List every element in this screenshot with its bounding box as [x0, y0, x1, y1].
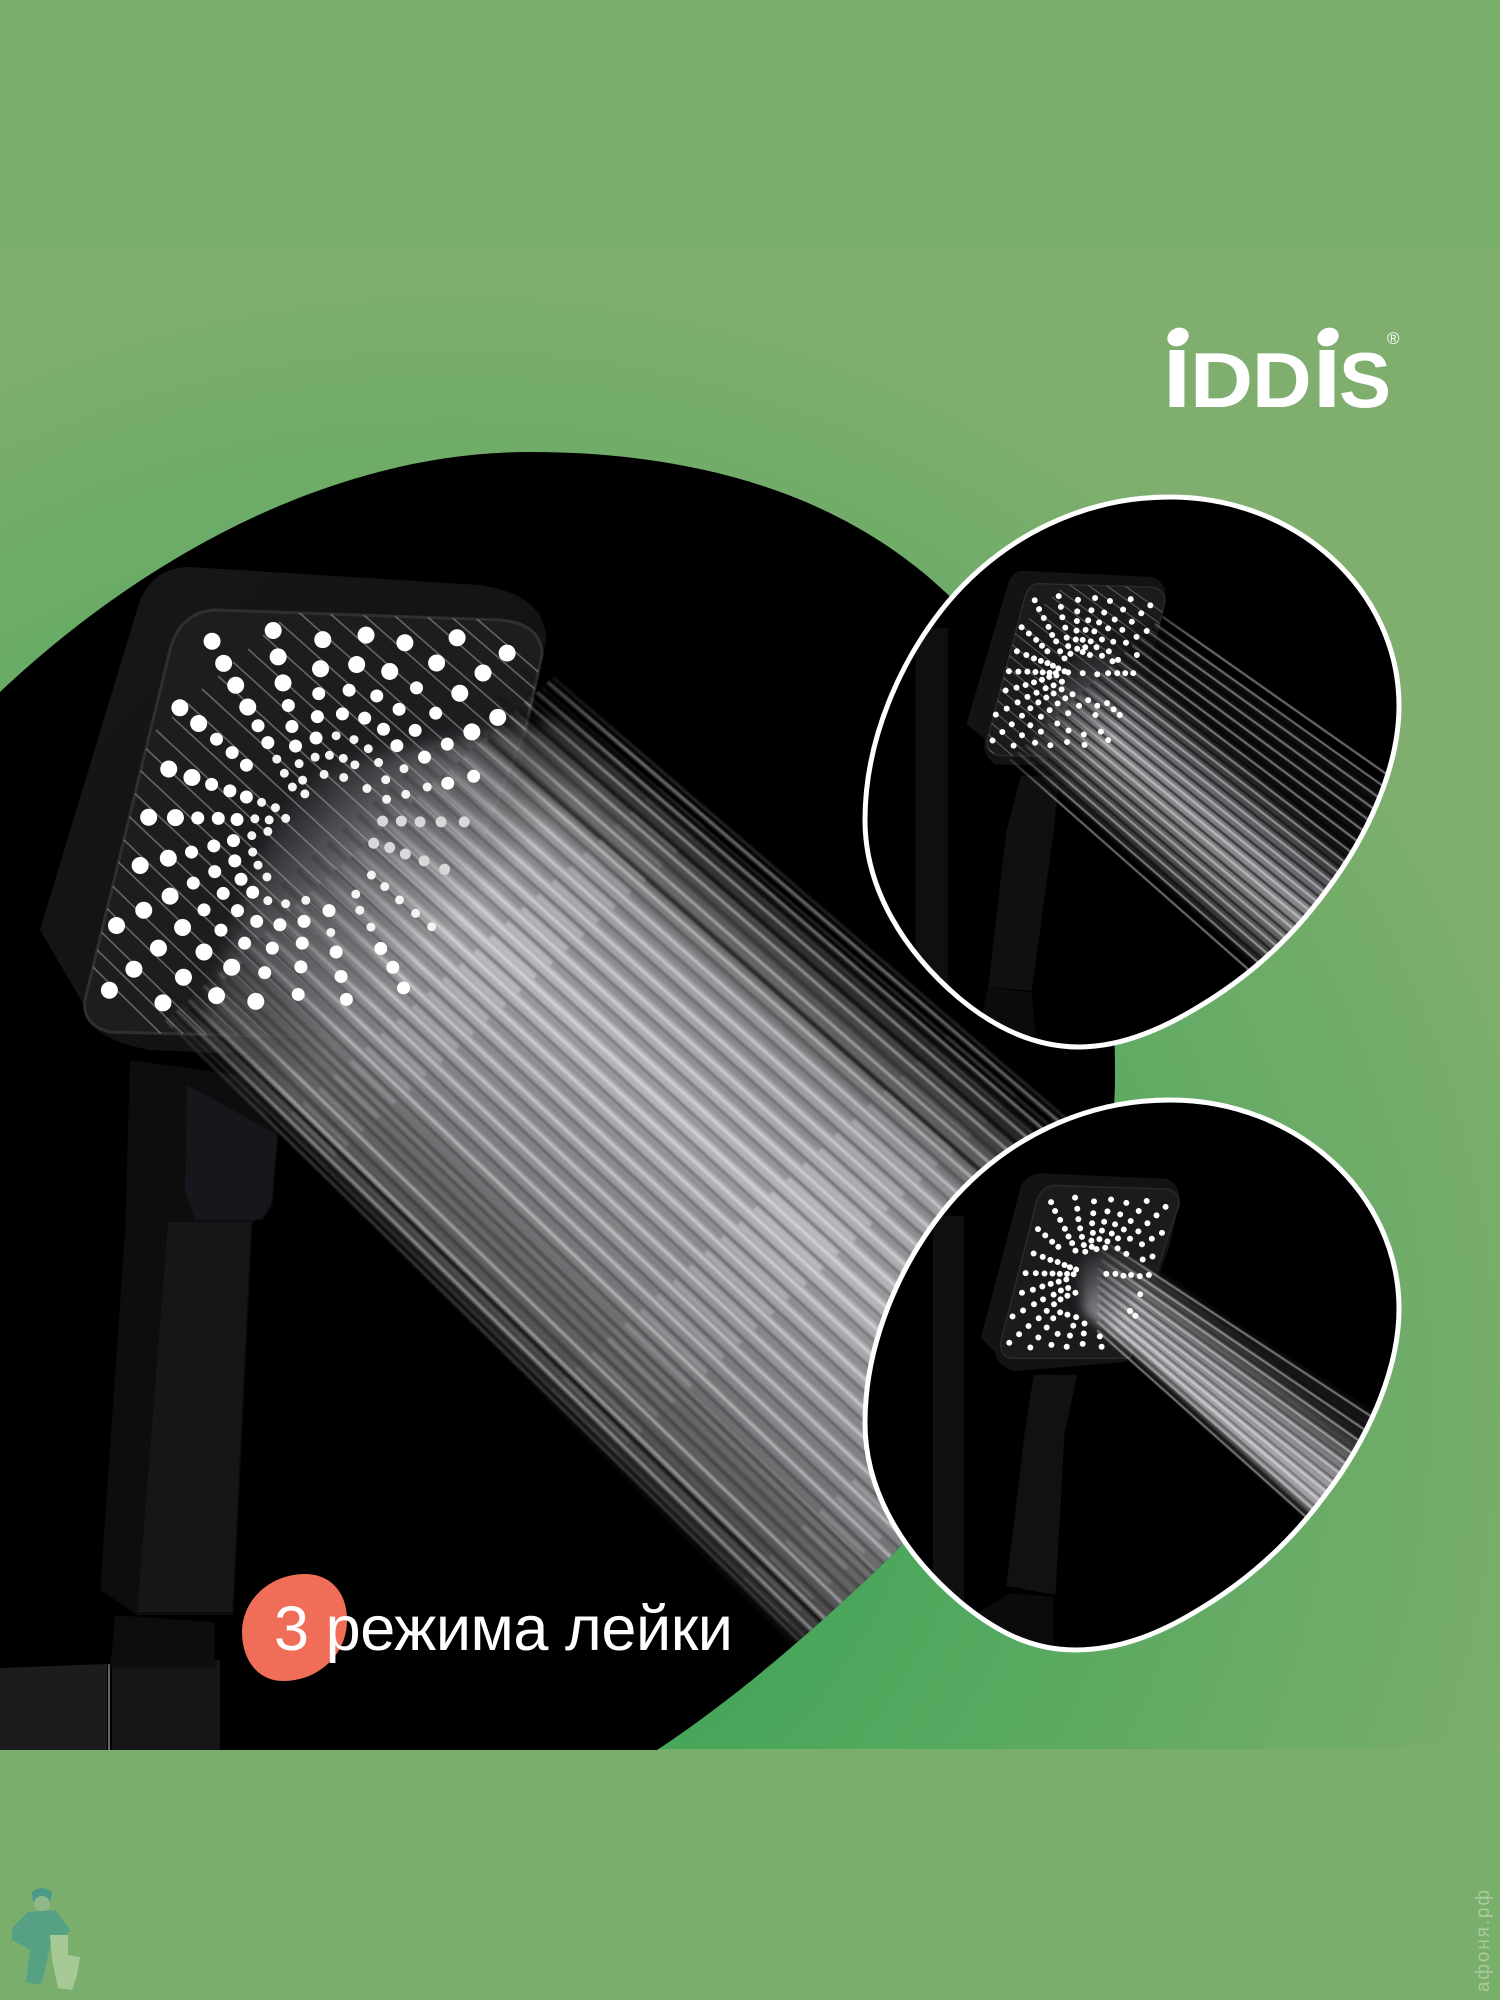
head [966, 571, 1166, 765]
shower head body [40, 567, 546, 1060]
logo: iDDiS: D [1252, 337, 1312, 424]
logo: iDDiS: i [1312, 309, 1342, 430]
streaks across face plate [988, 584, 1162, 756]
badge: red blob behind number [242, 1574, 347, 1681]
face plate [987, 584, 1165, 758]
white outline [865, 1100, 1399, 1650]
logo: iDDiS: S [1339, 336, 1391, 424]
logo: iDDiS: D [1190, 336, 1253, 424]
white outline [865, 497, 1399, 1047]
background panel: green gradient [0, 250, 1500, 1749]
logo: iDDiS: ® [1387, 329, 1400, 348]
rail [915, 628, 948, 998]
head [981, 1173, 1179, 1371]
nozzles [1009, 1198, 1166, 1348]
caption: 3 режима лейки: 3 режима лейки [274, 1594, 733, 1664]
wall bracket [0, 1660, 220, 1750]
nozzles [993, 596, 1150, 746]
streaks across face plate [92, 613, 538, 1036]
logo: iDDiS: i [1162, 309, 1192, 430]
logo: iDDiS [1167, 328, 1400, 408]
main photo: shower head with rain spray on black blob [0, 452, 1115, 1750]
background band: top [0, 0, 1500, 250]
face plate [1001, 1185, 1179, 1358]
handle [988, 776, 1059, 991]
spray [1010, 616, 1386, 970]
spray [1076, 1242, 1372, 1518]
inset: mist mode ellipse [862, 494, 1402, 1050]
watermark: plumber icon [12, 1888, 80, 1990]
nozzles [109, 631, 507, 1003]
rail [933, 1216, 964, 1608]
handle [1006, 1375, 1077, 1595]
shower head face plate [85, 610, 542, 1040]
handle of shower [100, 1060, 278, 1668]
streak gaps near edges [172, 690, 1018, 1642]
watermark: site name: афоня.рф [1473, 1890, 1494, 1992]
rain spray [165, 677, 1067, 1644]
inset: massage jet ellipse [860, 1095, 1405, 1655]
background band: bottom [0, 1749, 1500, 2000]
